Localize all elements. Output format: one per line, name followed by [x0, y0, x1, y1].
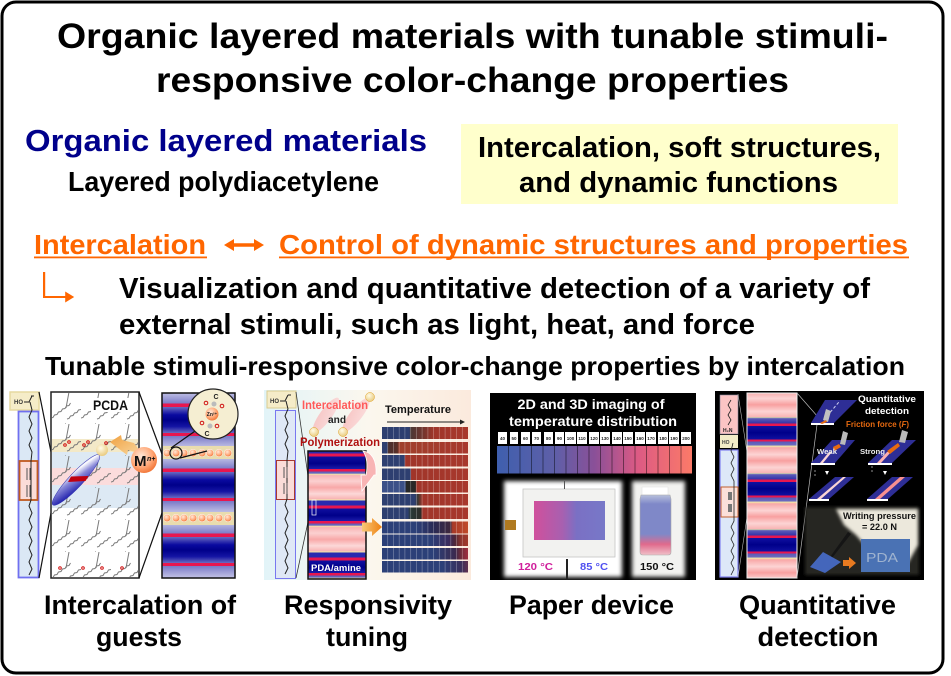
inset: Zn coordination	[170, 389, 238, 459]
temperature labels: 40	[500, 436, 505, 441]
temperature labels: 160	[636, 436, 644, 441]
text: visualization and detection: Visualization and quantitative detection of a variety of	[119, 273, 870, 305]
temperature labels: 200	[682, 436, 690, 441]
caption: responsivity tuning: tuning	[326, 622, 408, 652]
molecule: chain: H₂N	[723, 428, 733, 434]
temperature labels: 170	[647, 436, 655, 441]
inset: Zn coordination: C	[213, 394, 219, 401]
temperature labels: 140	[613, 436, 621, 441]
title: Organic layered materials with tunable stimuli-	[57, 17, 888, 56]
temperature labels: 110	[578, 436, 586, 441]
photo: paper device: 85 °C	[580, 561, 608, 573]
icon: metal ion: n+	[147, 456, 155, 463]
heading: organic layered materials: Organic layered materials	[25, 123, 427, 158]
photo: writing pressure: PDA	[866, 550, 898, 565]
label: writing pressure: = 22.0 N	[862, 522, 897, 532]
inset: Zn coordination: Zn²⁺	[207, 412, 218, 418]
arrow: orange right	[362, 518, 382, 536]
arrow: elbow	[43, 272, 74, 302]
caption: quantitative detection: detection	[758, 622, 878, 652]
callout: intercalation, soft structures	[461, 124, 898, 204]
label: PCDA: PCDA	[93, 397, 128, 413]
heading: tunable stimuli-responsive: Tunable stimuli-responsive color-change properties by intercalation	[45, 351, 905, 381]
diagram: layered stripes	[747, 393, 818, 578]
temperature labels: 60	[523, 436, 528, 441]
arrow: double-headed	[224, 239, 264, 251]
temperature labels: 50	[511, 436, 517, 441]
diagram: PCDA layers	[48, 392, 157, 578]
label: temperature	[385, 404, 465, 424]
temperature labels	[498, 432, 691, 444]
callout: intercalation, soft structures: and dynamic functions	[519, 167, 838, 199]
arrow: curved pink	[361, 451, 376, 491]
heading: control of dynamic structures: Control of dynamic structures and properties	[279, 229, 908, 260]
molecule: monomer chain	[10, 392, 51, 578]
caption: paper device: Paper device	[509, 590, 674, 620]
photo: vial	[632, 481, 685, 577]
color swatches	[497, 446, 692, 474]
panel title: temperature distribution	[509, 413, 677, 429]
ellipse: polymer	[48, 450, 104, 510]
photo: paper device: 120 °C	[518, 561, 553, 573]
temperature labels: 100	[567, 436, 575, 441]
temperature labels: 130	[601, 436, 609, 441]
caption: quantitative detection: Quantitative	[739, 590, 896, 620]
heat map: color-change grid	[382, 427, 468, 573]
molecule: chain: HO	[270, 399, 279, 405]
photo: writing pressure	[805, 507, 919, 575]
diagram: layered stripes with ions	[139, 389, 238, 578]
arrow: guest insertion	[110, 435, 142, 455]
temperature labels: 70	[534, 436, 539, 441]
temperature labels: 190	[670, 436, 678, 441]
subheading: layered polydiacetylene: Layered polydiacetylene	[68, 166, 379, 197]
diagram: PDA/amine stripes	[308, 451, 366, 579]
label: intercalation: Intercalation	[302, 398, 368, 412]
panel: quantitative detection	[715, 391, 924, 580]
inset: Zn coordination: C	[204, 431, 210, 438]
molecule: monomer chain: HO	[14, 400, 23, 406]
plates: friction writing: Weak	[817, 447, 838, 456]
temperature labels: 90	[557, 436, 562, 441]
icon: metal ion: M	[134, 453, 146, 470]
temperature labels: 120	[590, 436, 598, 441]
panel: paper device	[490, 393, 696, 580]
label: friction force: Friction force (F)	[846, 420, 909, 429]
label: polymerization: Polymerization	[300, 435, 380, 449]
label: quantitative detection: detection	[865, 406, 909, 417]
label: quantitative detection: Quantitative	[858, 394, 916, 405]
molecule: chain: HO	[722, 440, 730, 446]
photo: paper device	[504, 481, 622, 580]
molecule: chain	[720, 394, 747, 577]
caption: responsivity tuning: Responsivity	[284, 590, 452, 620]
plates: friction writing: Strong	[860, 447, 885, 456]
text: visualization and detection: external stimuli, such as light, heat, and force	[119, 309, 755, 341]
icon: amine molecules	[309, 392, 374, 436]
label: temperature: Temperature	[385, 404, 451, 416]
temperature labels: 150	[624, 436, 632, 441]
temperature labels: 180	[659, 436, 667, 441]
panel: intercalation of guests	[10, 389, 238, 578]
callout: intercalation, soft structures: Intercalation, soft structures,	[478, 132, 881, 164]
heading: intercalation: Intercalation	[34, 229, 206, 260]
label: writing pressure: Writing pressure	[843, 511, 916, 521]
diagram: PDA/amine stripes: PDA/amine	[311, 563, 361, 573]
panel title: 2D and 3D imaging of	[518, 396, 665, 412]
plates: friction writing	[809, 400, 916, 501]
temperature labels: 80	[546, 436, 551, 441]
molecule: chain	[267, 391, 311, 578]
panel: responsivity tuning	[264, 390, 471, 580]
icon: metal ion	[131, 447, 157, 473]
photo: vial: 150 °C	[640, 561, 674, 573]
title: responsive color-change properties	[156, 61, 789, 100]
caption: intercalation of guests: guests	[96, 622, 182, 652]
label: and: and	[328, 415, 346, 426]
caption: intercalation of guests: Intercalation of	[44, 590, 237, 620]
